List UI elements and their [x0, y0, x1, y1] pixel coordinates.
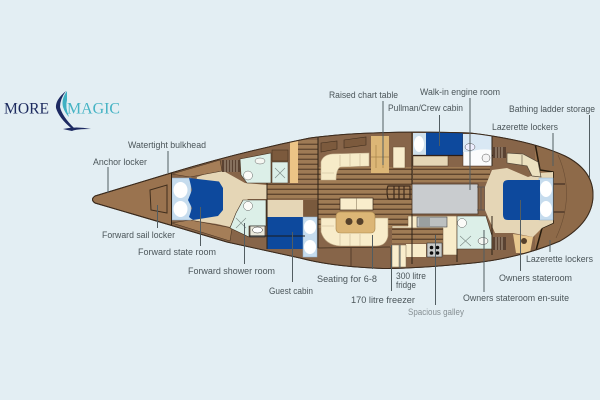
- label: Seating for 6-8: Seating for 6-8: [317, 274, 377, 284]
- galley floor bench: [406, 244, 426, 257]
- chart seat: [393, 147, 405, 168]
- forward berth side strips: [172, 160, 232, 241]
- pullman berth pillows: [413, 133, 426, 156]
- engine room: [412, 184, 485, 214]
- pullman head: [463, 134, 492, 166]
- bulkheads: [172, 132, 492, 264]
- logo: More Magic: [4, 91, 120, 131]
- label: Forward state room: Forward state room: [138, 247, 216, 257]
- label: Forward shower room: Forward shower room: [188, 266, 275, 276]
- lower settee: [321, 218, 388, 246]
- lower hull lockers: [318, 247, 391, 270]
- forward sail locker outline: [150, 185, 167, 213]
- yacht deck plan: [92, 130, 600, 270]
- wood panels top: [272, 150, 288, 161]
- label: 300 litre fridge: fridge: [396, 280, 416, 290]
- label: Spacious galley: Spacious galley: [408, 307, 464, 317]
- stern lockers: [534, 146, 592, 250]
- label: Bathing ladder storage: Bathing ladder storage: [509, 104, 595, 114]
- saloon floor planks: [318, 167, 412, 229]
- upper panels: [321, 137, 366, 152]
- owners cabin floor: [485, 168, 553, 237]
- label: Watertight bulkhead: Watertight bulkhead: [128, 140, 206, 150]
- guest berth mattress: [267, 217, 305, 249]
- pullman berth mattress: [426, 132, 463, 155]
- logo swoosh: [56, 91, 91, 131]
- fridge and freezer: [392, 245, 406, 267]
- logo word: MORE: MORE: [4, 100, 49, 118]
- forward berth mattress: [188, 178, 223, 220]
- stove: [427, 243, 442, 257]
- forward berth pillows: [172, 178, 191, 220]
- label: Forward sail locker: Forward sail locker: [102, 230, 175, 240]
- upper steps: [493, 147, 506, 158]
- pullman floor: [413, 156, 448, 166]
- owners berth mattress: [503, 180, 540, 220]
- galley: [392, 216, 457, 255]
- corridor planks: [268, 184, 318, 199]
- label: Raised chart table: Raised chart table: [329, 90, 398, 100]
- label: Lazerette lockers lower: Lazerette lockers: [526, 254, 593, 264]
- label: 170 litre freezer: 170 litre freezer: [351, 295, 415, 305]
- guest berth pillows: [303, 217, 317, 257]
- label: Lazerette lockers upper: Lazerette lockers: [492, 122, 558, 132]
- forward head top: [240, 153, 271, 183]
- label: Guest cabin: Guest cabin: [269, 286, 313, 296]
- galley sink counter: [417, 217, 447, 227]
- owners berth pillows: [539, 178, 553, 220]
- forward cabin floor: [190, 169, 267, 227]
- logo word: MAGIC: MAGIC: [67, 100, 120, 118]
- owners head: [457, 216, 492, 249]
- label: 300 litre fridge: 300 litre: [396, 271, 426, 281]
- hull: [92, 132, 593, 268]
- chart table: [371, 136, 389, 173]
- leader lines: [108, 98, 590, 305]
- owners sofa: [507, 153, 541, 177]
- step treads: [387, 186, 410, 199]
- tan locker: [290, 140, 298, 183]
- label: Pullman/Crew cabin: Pullman/Crew cabin: [388, 103, 463, 113]
- forward shower room: [230, 200, 266, 237]
- compass locker: [513, 234, 533, 253]
- lower steps: [493, 237, 506, 250]
- saloon table backs: [340, 198, 373, 210]
- shower top: [272, 162, 288, 183]
- label: Walk-in engine room: Walk-in engine room: [420, 87, 500, 97]
- label: Owners stateroom: Owners stateroom: [499, 273, 572, 283]
- forward steps: [222, 160, 240, 172]
- label: Owners stateroom en-suite: Owners stateroom en-suite: [463, 293, 569, 303]
- labels: [93, 87, 595, 317]
- upper settee: [321, 153, 369, 180]
- saloon table: [336, 212, 375, 233]
- label: Anchor locker: Anchor locker: [93, 157, 147, 167]
- guest cabin floor: [267, 200, 303, 217]
- interior wood base: [172, 130, 535, 270]
